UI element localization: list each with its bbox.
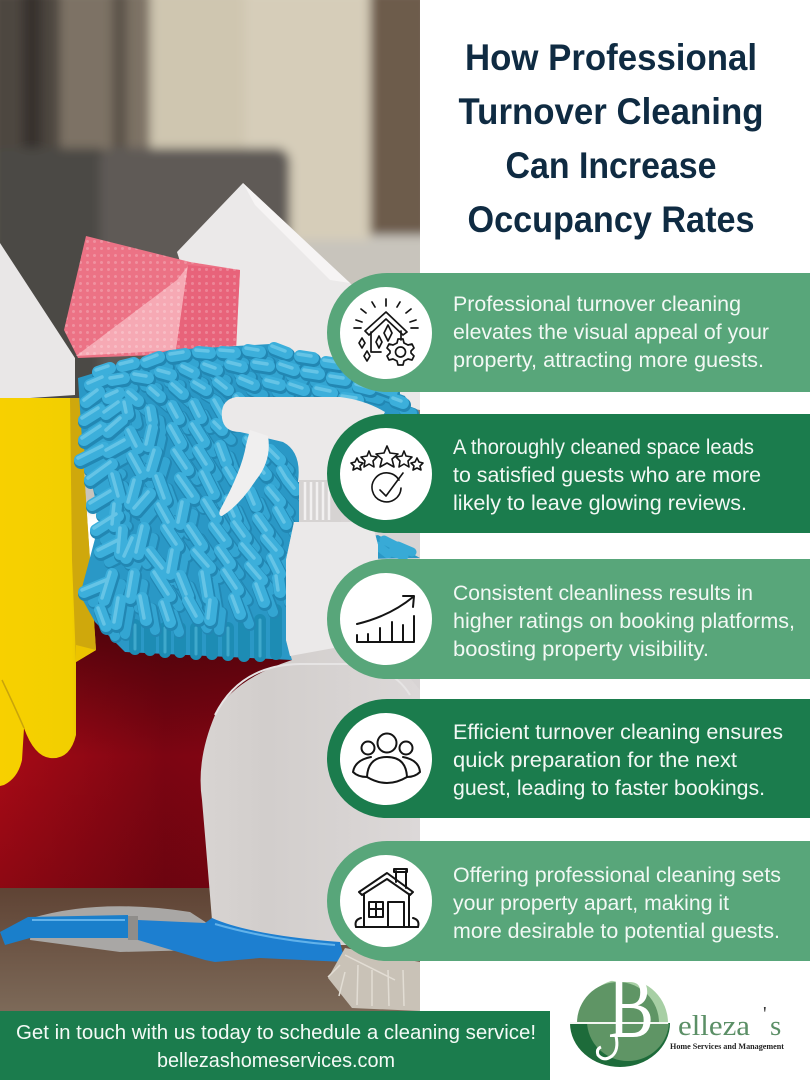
footer call to action: Get in touch with us today to schedule a cleaning service! — [16, 1022, 536, 1044]
title: Turnover Cleaning — [458, 91, 764, 132]
text: benefit 5: Offering professional cleaning sets — [453, 864, 781, 887]
blurred room background — [0, 0, 430, 510]
text: benefit 5: more desirable to potential guests. — [453, 920, 780, 943]
duster handle — [0, 906, 345, 962]
icon: group of people — [340, 713, 432, 805]
panel: benefit 1 — [327, 273, 810, 392]
white cone right — [177, 183, 420, 410]
text: benefit 3 — [453, 582, 795, 661]
spray bottle — [201, 397, 420, 945]
red bucket — [0, 620, 300, 892]
text: benefit 1: Professional turnover cleaning — [453, 293, 741, 316]
text: benefit 5: your property apart, making it — [453, 892, 729, 915]
footer call to action: bellezashomeservices.com — [157, 1050, 395, 1072]
wood floor — [0, 888, 420, 1013]
text: benefit 2 — [453, 436, 761, 515]
text: benefit 1 — [453, 293, 769, 372]
title: How Professional — [465, 37, 757, 78]
text: benefit 2: A thoroughly cleaned space leads — [453, 436, 754, 459]
text: benefit 3: higher ratings on booking platforms, — [453, 610, 795, 633]
text: benefit 1: property, attracting more guests. — [453, 349, 764, 372]
title: Can Increase — [506, 145, 716, 186]
light backdrop behind bottle — [341, 512, 420, 690]
text: benefit 5 — [453, 864, 781, 943]
icon: house — [340, 855, 432, 947]
icon: five stars and check mark — [340, 428, 432, 520]
text: benefit 2: to satisfied guests who are more — [453, 464, 761, 487]
text: benefit 3: Consistent cleanliness results in — [453, 582, 753, 605]
yellow glove — [0, 398, 96, 786]
icon: rising bar chart — [340, 573, 432, 665]
logo: Belleza's Home Services and Management: s — [770, 1010, 781, 1042]
text: benefit 4: Efficient turnover cleaning ensures — [453, 721, 783, 744]
panel: benefit 4 — [327, 699, 810, 818]
text: benefit 1: elevates the visual appeal of your — [453, 321, 769, 344]
footer call to action — [0, 1011, 550, 1080]
text: benefit 4: quick preparation for the next — [453, 749, 737, 772]
duster brush — [328, 948, 420, 1011]
title: Occupancy Rates — [468, 199, 754, 240]
logo: Belleza's Home Services and Management — [570, 980, 784, 1067]
logo: Belleza's Home Services and Management: B — [608, 958, 654, 1057]
pink cloth — [64, 236, 240, 358]
panel: benefit 2 — [327, 414, 810, 533]
panel: white text column — [420, 0, 810, 1010]
white cone left — [0, 243, 75, 400]
text: benefit 4 — [453, 721, 783, 800]
blue mop — [78, 344, 420, 660]
panel: benefit 3 — [327, 559, 810, 679]
logo: Belleza's Home Services and Management: Home Services and Management — [670, 1041, 784, 1051]
panel: cleaning supplies photo — [0, 0, 430, 1013]
text: benefit 2: likely to leave glowing reviews. — [453, 492, 747, 515]
logo: Belleza's Home Services and Management: elleza — [678, 1010, 750, 1042]
title — [458, 37, 764, 240]
text: benefit 4: guest, leading to faster bookings. — [453, 777, 765, 800]
panel: benefit 5 — [327, 841, 810, 961]
logo: Belleza's Home Services and Management: ' — [763, 1003, 767, 1025]
text: benefit 3: boosting property visibility. — [453, 638, 709, 661]
icon: sparkling house with gear — [340, 287, 432, 379]
